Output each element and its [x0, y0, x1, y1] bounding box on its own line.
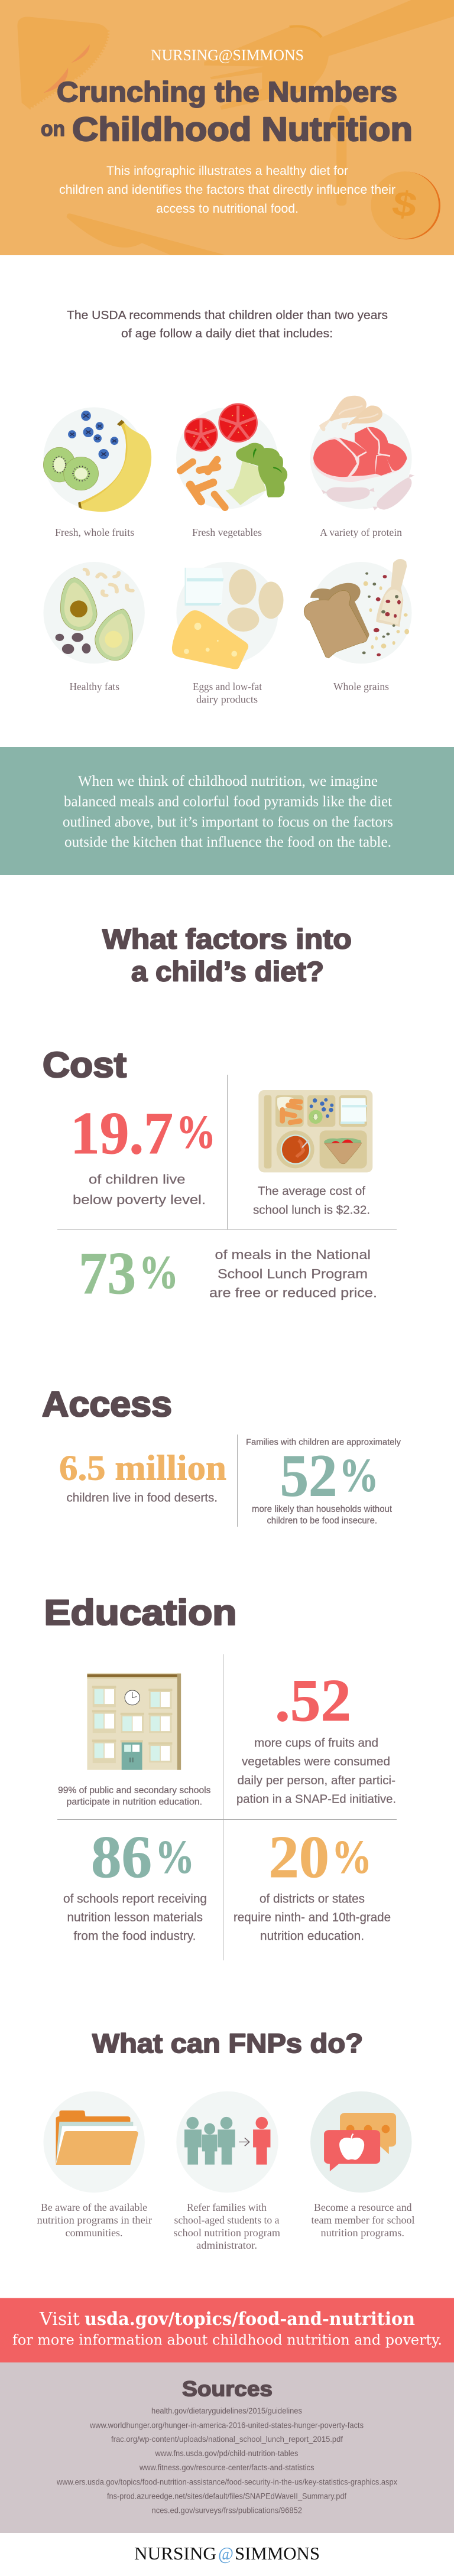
text: food insecure: [252, 1504, 393, 1526]
icon: healthy fats: [43, 562, 145, 663]
heading: cost: Cost: [43, 1045, 127, 1085]
logo: footer: SIMMONS: [235, 2543, 320, 2564]
text: become a resource: nutrition programs.: [320, 2227, 404, 2239]
label: eggs and dairy: [193, 681, 262, 705]
text: SNAP-Ed: [236, 1736, 396, 1806]
heading: education: Education: [44, 1593, 236, 1632]
panel: teal statement: outside the kitchen that influence the food on the table.: [64, 834, 391, 850]
label: whole grains: Whole grains: [333, 681, 389, 692]
text: 99% of schools: participate in nutrition education.: [66, 1797, 202, 1807]
stat: 73%: %: [139, 1247, 179, 1299]
stat: 19.7%: 19.7: [70, 1100, 173, 1167]
stat: 19.7%: %: [176, 1107, 216, 1158]
panel: teal statement: balanced meals and colorful food pyramids like the diet: [64, 794, 392, 809]
stat: 52%: 52: [280, 1443, 337, 1509]
title: on: [41, 116, 65, 141]
list: source links: health.gov/dietaryguidelines/2015/guidelines: [151, 2406, 302, 2415]
panel: header banner: [0, 0, 454, 255]
list: source links: nces.ed.gov/surveys/frss/publications/96852: [151, 2506, 302, 2515]
stat: 73%: 73: [79, 1240, 136, 1307]
logo: footer: NURSING: [134, 2543, 216, 2564]
panel: sources: [0, 2362, 454, 2533]
intro text: access to nutritional food.: [156, 202, 299, 216]
logo: footer: @: [218, 2543, 234, 2564]
heading: sources: Sources: [182, 2376, 273, 2401]
list: source links: [56, 2406, 397, 2515]
panel: teal statement: When we think of childhood nutrition, we imagine: [78, 773, 378, 789]
text: school lunch program: [209, 1247, 377, 1300]
label: eggs and dairy: dairy products: [196, 694, 258, 705]
text: food industry: of schools report receiving: [63, 1892, 207, 1906]
panel: teal statement: outlined above, but it’s important to focus on the factors: [63, 814, 393, 830]
stat: 52%: [280, 1443, 378, 1509]
heading: what factors: [102, 923, 352, 987]
panel: access section: [42, 1384, 401, 1527]
list: source links: frac.org/wp-content/uploads/national_school_lunch_report_2015.pdf: [111, 2435, 343, 2444]
text: be aware: [37, 2201, 152, 2239]
text: refer families: school-aged students to a: [174, 2214, 280, 2226]
stat: 6.5 million: 6.5 million: [59, 1449, 226, 1488]
title: [41, 77, 413, 148]
text: become a resource: team member for school: [311, 2214, 415, 2226]
icon: referral people: [176, 2092, 278, 2193]
text: poverty: [73, 1172, 206, 1207]
panel: call to action: [0, 2298, 454, 2362]
text: refer families: school nutrition program: [174, 2227, 280, 2239]
icon: whole grains: [304, 559, 411, 663]
text: school lunch program: School Lunch Program: [218, 1267, 368, 1281]
text: SNAP-Ed: more cups of fruits and: [254, 1736, 378, 1750]
stat: 52%: %: [339, 1450, 378, 1502]
text: families: Families with children are approximately: [246, 1437, 401, 1448]
panel: call to action: Visit: [39, 2309, 80, 2330]
panel: education section: [44, 1593, 397, 1960]
text: be aware: nutrition programs in their: [37, 2214, 152, 2226]
text: SNAP-Ed: pation in a SNAP-Ed initiative.: [236, 1793, 396, 1806]
heading: access: Access: [42, 1384, 172, 1424]
text: school lunch program: are free or reduced price.: [209, 1286, 377, 1300]
icon: lunch tray: [258, 1090, 372, 1172]
text: refer families: [174, 2201, 280, 2251]
icon: fruits: [43, 407, 151, 512]
logo: footer: [134, 2543, 320, 2564]
intro text: [59, 164, 395, 216]
intro text: This infographic illustrates a healthy diet for: [106, 164, 348, 178]
title: Crunching the Numbers: [57, 77, 397, 108]
text: SNAP-Ed: vegetables were consumed: [242, 1755, 390, 1768]
label: fresh vegetables: Fresh vegetables: [192, 526, 262, 538]
panel: cost section: [43, 1045, 397, 1307]
text: poverty: of children live: [89, 1172, 186, 1186]
text: SNAP-Ed: daily per person, after partici-: [238, 1774, 395, 1787]
text: food deserts: children live in food deserts.: [66, 1491, 218, 1504]
stat: 86%: %: [155, 1832, 194, 1884]
text: refer families: Refer families with: [187, 2201, 267, 2213]
text: districts: require ninth- and 10th-grade: [234, 1911, 391, 1924]
panel: call to action: usda.gov/topics/food-and-nutrition: [85, 2309, 415, 2330]
text: be aware: communities.: [65, 2227, 123, 2239]
panel: recommended foods: [43, 396, 413, 705]
text: be aware: Be aware of the available: [41, 2201, 147, 2213]
text: food insecure: more likely than households without: [252, 1504, 393, 1514]
text: lunch cost: The average cost of: [258, 1185, 365, 1198]
icon: speech bubbles with apple: [310, 2092, 411, 2193]
stat: 20%: 20: [268, 1824, 329, 1891]
text: refer families: administrator.: [196, 2239, 257, 2251]
logo: Nursing@Simmons: NURSING@SIMMONS: [151, 47, 304, 64]
panel: FNP actions: [37, 2092, 415, 2251]
text: lunch cost: [253, 1185, 370, 1217]
USDA recommendation text: [67, 308, 388, 340]
panel: teal statement: [0, 747, 454, 875]
stat: 20%: %: [332, 1832, 372, 1884]
list: source links: www.ers.usda.gov/topics/food-nutrition-assistance/food-security-in-the-us/key-statistics-graphics.aspx: [56, 2478, 397, 2486]
text: food insecure: children to be food insecure.: [267, 1516, 377, 1526]
text: districts: [234, 1892, 391, 1943]
panel: call to action: for more information about childhood nutrition and poverty.: [12, 2331, 442, 2348]
label: healthy fats: Healthy fats: [70, 681, 119, 692]
text: 99% of schools: 99% of public and secondary schools: [58, 1785, 211, 1796]
heading: what can FNPs do: What can FNPs do?: [92, 2028, 363, 2058]
text: school lunch program: of meals in the National: [215, 1247, 371, 1262]
icon: eggs and dairy: [172, 562, 284, 669]
text: food industry: [63, 1892, 207, 1943]
icon: folder: [43, 2092, 145, 2193]
text: districts: nutrition education.: [260, 1930, 364, 1943]
heading: what factors: a child’s diet?: [131, 956, 324, 987]
stat: .52: .52: [275, 1667, 351, 1734]
text: poverty: below poverty level.: [73, 1192, 206, 1207]
USDA recommendation text: The USDA recommends that children older than two years: [67, 308, 388, 322]
label: fresh fruits: Fresh, whole fruits: [55, 526, 134, 538]
label: variety of protein: A variety of protein: [320, 526, 402, 538]
icon: vegetables: [176, 403, 287, 509]
text: become a resource: [311, 2201, 415, 2239]
text: become a resource: Become a resource and: [314, 2201, 411, 2213]
list: source links: fns-prod.azureedge.net/sites/default/files/SNAPEdWaveII_Summary.pdf: [107, 2492, 346, 2500]
stat: 86%: [91, 1824, 194, 1891]
text: food industry: from the food industry.: [73, 1930, 196, 1943]
text: lunch cost: school lunch is $2.32.: [253, 1204, 370, 1217]
icon: school building: [87, 1673, 181, 1770]
label: eggs and dairy: Eggs and low-fat: [193, 681, 262, 692]
list: source links: www.fns.usda.gov/pd/child-nutrition-tables: [155, 2449, 299, 2458]
text: food industry: nutrition lesson materials: [67, 1911, 203, 1924]
list: source links: www.worldhunger.org/hunger-in-america-2016-united-states-hunger-poverty-facts: [89, 2421, 364, 2429]
panel: header banner: $: [390, 184, 420, 225]
text: districts: of districts or states: [260, 1892, 365, 1906]
list: source links: www.fitness.gov/resource-center/facts-and-statistics: [139, 2463, 314, 2472]
heading: what factors: What factors into: [102, 923, 352, 955]
title: Childhood Nutrition: [72, 110, 413, 148]
stat: 86%: 86: [91, 1824, 152, 1891]
text: 99% of schools: [58, 1785, 211, 1807]
intro text: children and identifies the factors that directly influence their: [59, 183, 395, 197]
icon: protein: [310, 396, 413, 510]
USDA recommendation text: of age follow a daily diet that includes:: [121, 327, 333, 340]
stat: 73%: [79, 1240, 179, 1307]
stat: 20%: [268, 1824, 372, 1891]
